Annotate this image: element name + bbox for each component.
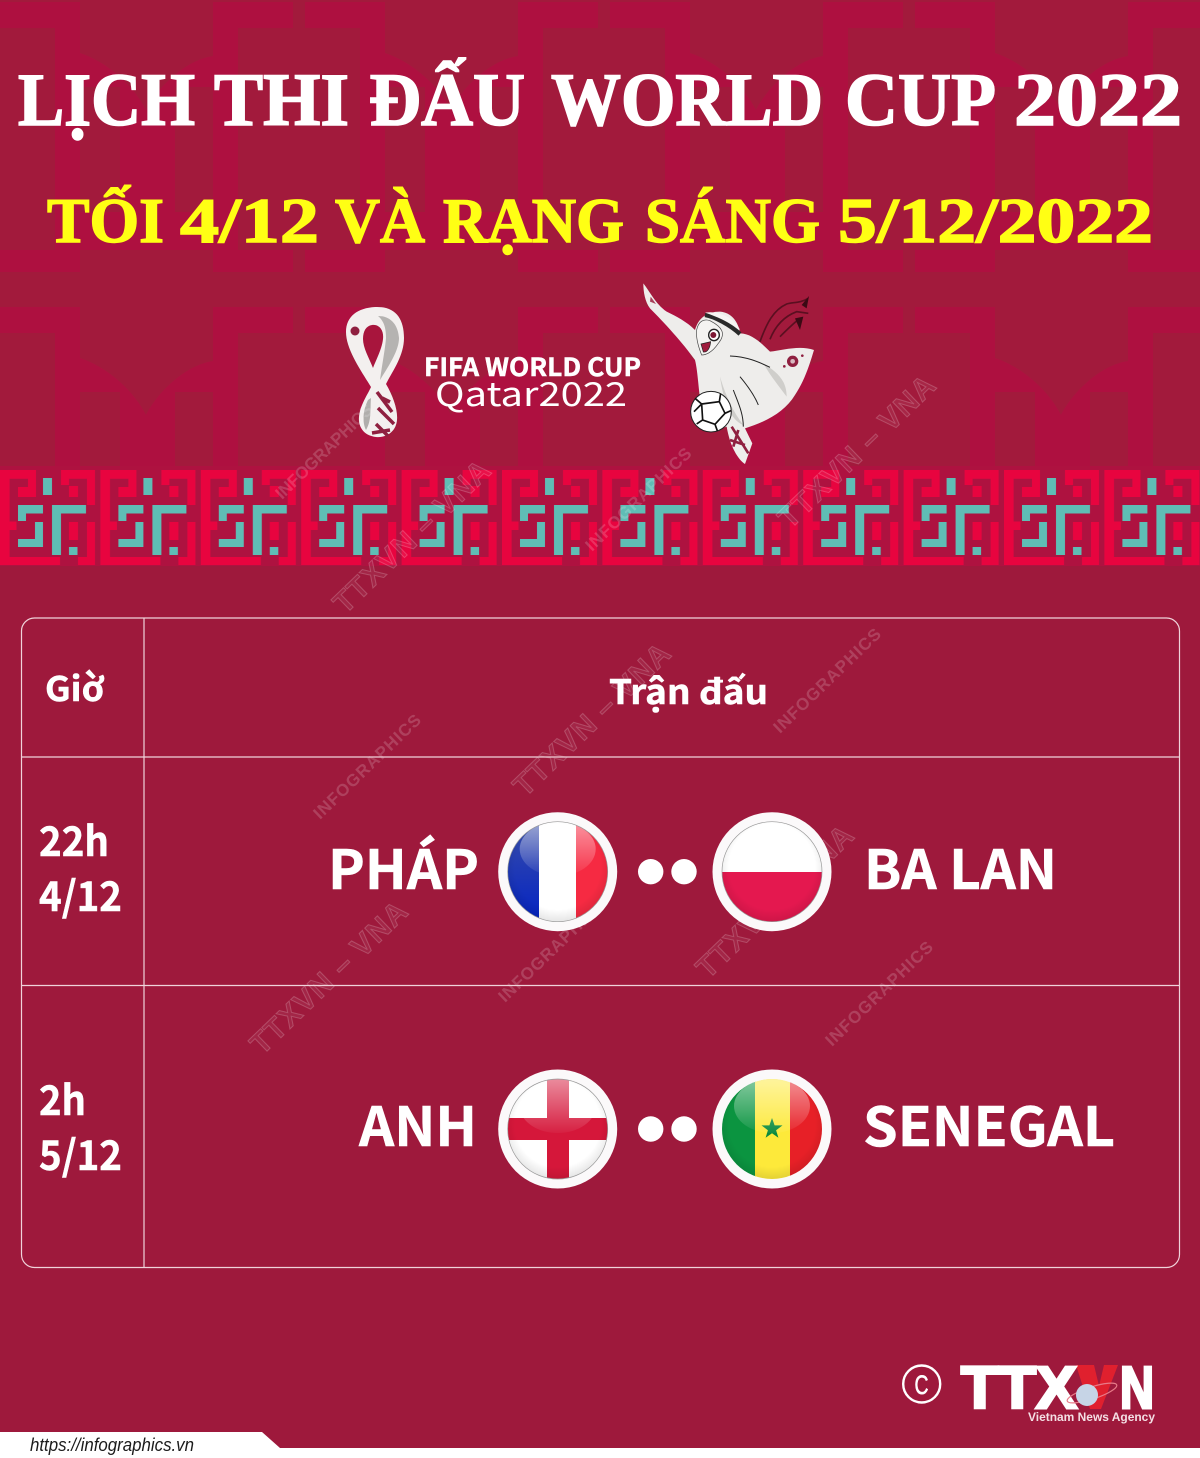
match 1: Pháp vs Ba Lan: [328, 812, 1057, 931]
logo: FIFA World Cup Qatar 2022 emblem: [346, 307, 404, 437]
watermarks: [244, 369, 942, 1061]
copyright symbol: C: [914, 1370, 928, 1400]
title: 2022: [1014, 59, 1182, 142]
match 2: Anh vs Senegal: ANH: [358, 1083, 477, 1162]
time: 2h 5/12: 2h: [39, 1067, 86, 1127]
match 2: Anh vs Senegal: [358, 1070, 1115, 1188]
time: 2h 5/12: [39, 1067, 122, 1182]
watermarks: INFOGRAPHICS: [495, 895, 608, 1006]
footer strip with URL: [0, 1432, 1200, 1458]
logo: TTXVN: [961, 1355, 1155, 1424]
watermarks: INFOGRAPHICS: [310, 711, 425, 823]
footer strip with URL: https://infographics.vn: [30, 1435, 194, 1455]
title: THI: [214, 59, 349, 142]
watermarks: TTXVN – VNA: [244, 895, 414, 1061]
decorative meander band: [0, 466, 1200, 566]
subtitle: [47, 185, 1153, 256]
time: 2h 5/12: 5/12: [39, 1122, 122, 1182]
logo wordmark: Qatar2022: [435, 368, 627, 416]
watermarks: TTXVN – VNA: [690, 819, 860, 985]
watermarks: INFOGRAPHICS: [582, 444, 695, 555]
title: ĐẤU: [369, 59, 525, 142]
watermarks: TTXVN – VNA: [772, 369, 942, 535]
watermarks: TTXVN – VNA: [327, 454, 497, 620]
match 2: Anh vs Senegal: SENEGAL: [863, 1083, 1115, 1162]
vs dots: [638, 1116, 697, 1142]
logo wordmark: [424, 348, 641, 416]
logo: TTXVN: TTX: [961, 1355, 1077, 1421]
header: time: Giờ: [45, 662, 105, 711]
icon: France flag: [498, 812, 617, 931]
watermarks: INFOGRAPHICS: [770, 625, 885, 737]
time: 22h 4/12: [39, 808, 122, 923]
title: WORLD: [551, 59, 823, 142]
logo: TTXVN: N: [1120, 1355, 1154, 1421]
copyright symbol: [903, 1366, 940, 1402]
logo wordmark: FIFA WORLD CUP: [424, 348, 641, 384]
icon: La'eeb mascot: [643, 283, 814, 464]
title: [18, 59, 1182, 142]
header: match: Trận đấu: [609, 665, 768, 714]
subtitle: SÁNG: [645, 186, 820, 256]
table frame and grid: [22, 618, 1180, 1268]
time: 22h 4/12: 4/12: [39, 863, 122, 923]
subtitle: TỐI: [47, 185, 164, 256]
schedule table: [22, 618, 1180, 1268]
icon: England flag: [498, 1070, 617, 1188]
subtitle: 5/12/2022: [838, 186, 1153, 256]
logo: TTXVN: Vietnam News Agency: [1028, 1410, 1155, 1424]
title: CUP: [845, 59, 996, 142]
icon: Senegal flag: [712, 1070, 832, 1188]
background arch pattern: [0, 0, 1200, 468]
watermarks: INFOGRAPHICS: [822, 938, 937, 1050]
watermarks: INFOGRAPHICS: [272, 400, 377, 503]
watermarks: TTXVN – VNA: [507, 637, 677, 803]
icon: Poland flag: [712, 812, 832, 931]
subtitle: 4/12: [180, 186, 319, 256]
match 1: Pháp vs Ba Lan: PHÁP: [328, 826, 479, 905]
subtitle: VÀ: [335, 186, 425, 256]
title: LỊCH: [18, 59, 195, 142]
subtitle: RẠNG: [443, 186, 624, 256]
vs dots: [638, 859, 697, 884]
match 1: Pháp vs Ba Lan: BA LAN: [864, 826, 1057, 905]
time: 22h 4/12: 22h: [39, 808, 109, 868]
